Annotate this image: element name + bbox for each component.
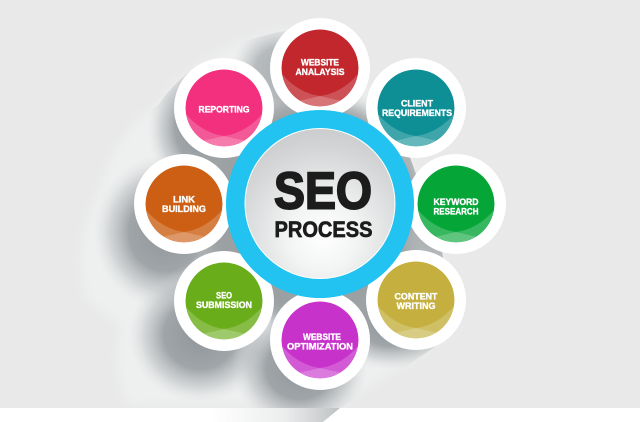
step: content writing [366,250,466,350]
step: link building [134,154,234,254]
step: website analysis: WEBSITE [301,58,339,68]
heading: SEO: SEO [274,162,372,220]
step: client requirements [366,58,466,158]
step: seo submission: SUBMISSION [196,300,252,311]
step: reporting: REPORTING [198,104,250,116]
step: reporting [174,58,274,158]
step: website optimization [270,290,370,390]
step: link building: LINK [173,194,195,206]
step: seo submission [174,251,274,351]
step: website optimization: OPTIMIZATION [287,342,353,352]
step: keyword research [406,154,506,254]
step: client requirements: CLIENT [401,98,433,110]
step: keyword research: RESEARCH [434,206,479,218]
step: client requirements: REQUIREMENTS [382,108,452,119]
cast shadows [101,31,443,408]
central hub [226,110,414,298]
step: content writing: CONTENT [394,292,438,302]
step: content writing: WRITING [396,301,436,312]
step: website analysis: ANALAYSIS [296,67,344,78]
white floor strip [0,408,640,422]
heading: PROCESS: PROCESS [274,217,372,242]
step: seo submission: SEO [216,290,232,302]
soft light halo around shadows [81,30,452,404]
shadow fading across the floor [210,408,340,422]
step: website analysis [270,18,370,118]
step: keyword research: KEYWORD [434,197,479,208]
step: link building: BUILDING [162,204,206,215]
step: website optimization: WEBSITE [303,332,341,343]
